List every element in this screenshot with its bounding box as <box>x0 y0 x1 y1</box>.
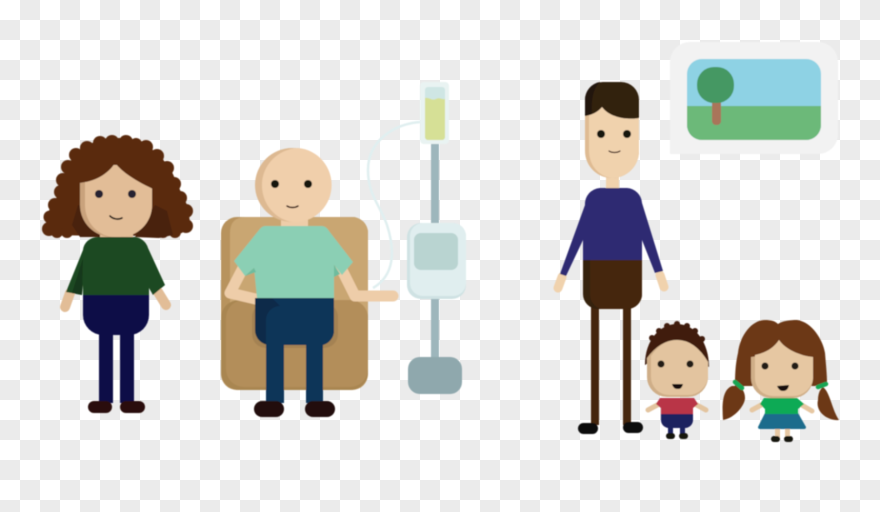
eyes <box>597 130 631 138</box>
hands <box>648 403 706 410</box>
pole <box>431 144 439 358</box>
tube <box>368 122 420 288</box>
face <box>751 340 813 398</box>
neck <box>281 216 308 228</box>
head <box>647 340 708 397</box>
neck <box>100 228 133 240</box>
infusion pump <box>407 223 466 299</box>
bald head <box>255 148 329 222</box>
woman with curly hair <box>42 135 193 413</box>
stand base <box>408 357 462 394</box>
green sweater <box>66 237 165 295</box>
eyes <box>95 190 136 198</box>
smile <box>609 151 620 152</box>
hands <box>752 404 812 411</box>
tall man <box>558 82 664 434</box>
trousers <box>661 414 693 428</box>
eyes <box>271 180 312 188</box>
shoes <box>578 422 643 434</box>
legs and shoes <box>771 427 793 442</box>
arms <box>230 268 393 302</box>
hair <box>645 321 709 367</box>
hair <box>735 320 827 388</box>
legs <box>591 305 631 425</box>
pigtails <box>723 386 839 420</box>
IV drip stand <box>368 82 466 394</box>
shoes <box>88 401 145 413</box>
smile <box>777 385 789 391</box>
smile <box>672 384 683 389</box>
curly hair <box>42 135 193 238</box>
purple sweater <box>560 188 663 276</box>
trousers <box>583 260 642 309</box>
landscape picture <box>687 59 821 140</box>
smile <box>110 216 122 219</box>
neck <box>606 174 619 190</box>
patient in armchair <box>221 148 393 417</box>
trousers <box>255 298 334 345</box>
legs and shoes <box>666 426 688 439</box>
head <box>585 100 639 178</box>
mint shirt <box>234 226 353 298</box>
eyes <box>658 360 694 368</box>
red shirt <box>656 398 698 414</box>
inner shaded hair <box>72 205 173 238</box>
shoes <box>254 401 335 417</box>
smile <box>287 206 298 208</box>
hair ties <box>735 382 826 388</box>
hair <box>585 82 639 119</box>
face <box>80 165 152 237</box>
drip bag <box>420 82 449 144</box>
hands <box>558 275 664 288</box>
girl with pigtails <box>723 320 839 442</box>
armchair <box>221 217 368 390</box>
green shirt <box>760 398 804 414</box>
skirt <box>758 413 806 429</box>
hair fringe <box>76 150 156 189</box>
legs <box>99 330 134 403</box>
navy trousers <box>83 295 149 335</box>
thought bubble <box>670 42 838 154</box>
boy <box>645 321 709 439</box>
eyes <box>762 362 798 370</box>
arms <box>65 292 166 307</box>
